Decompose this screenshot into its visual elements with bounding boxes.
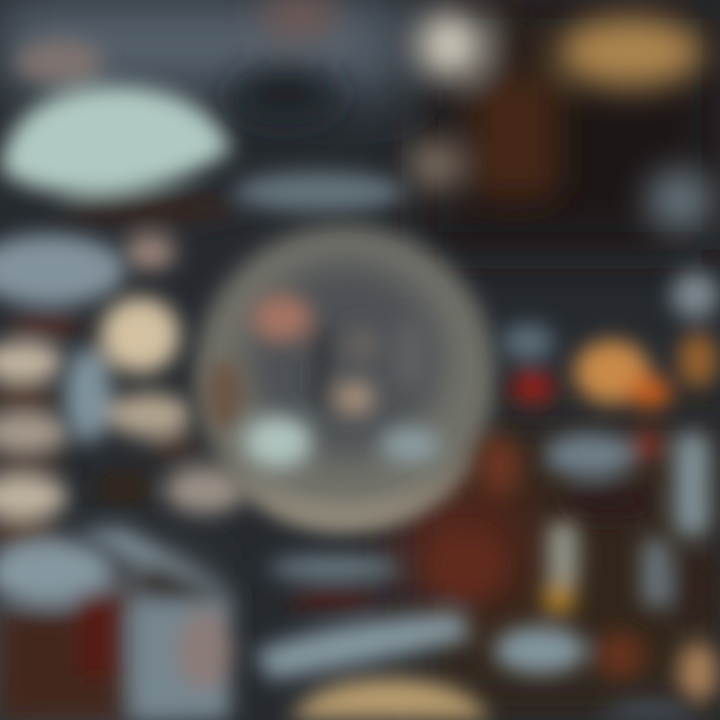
coin inner face: [247, 262, 443, 458]
chart: central coin: [195, 225, 495, 530]
coin body: [195, 225, 495, 525]
panel: centre left coins: [64, 297, 245, 720]
panel: top right bottles: [230, 0, 714, 232]
panel: left coin stack: [0, 234, 126, 720]
coin highlights: [207, 294, 440, 468]
panel: right side coins: [502, 271, 719, 702]
panel: top left dome: [0, 40, 405, 270]
coin lower rim: [205, 420, 495, 530]
panel: bottom coins: [255, 435, 705, 720]
